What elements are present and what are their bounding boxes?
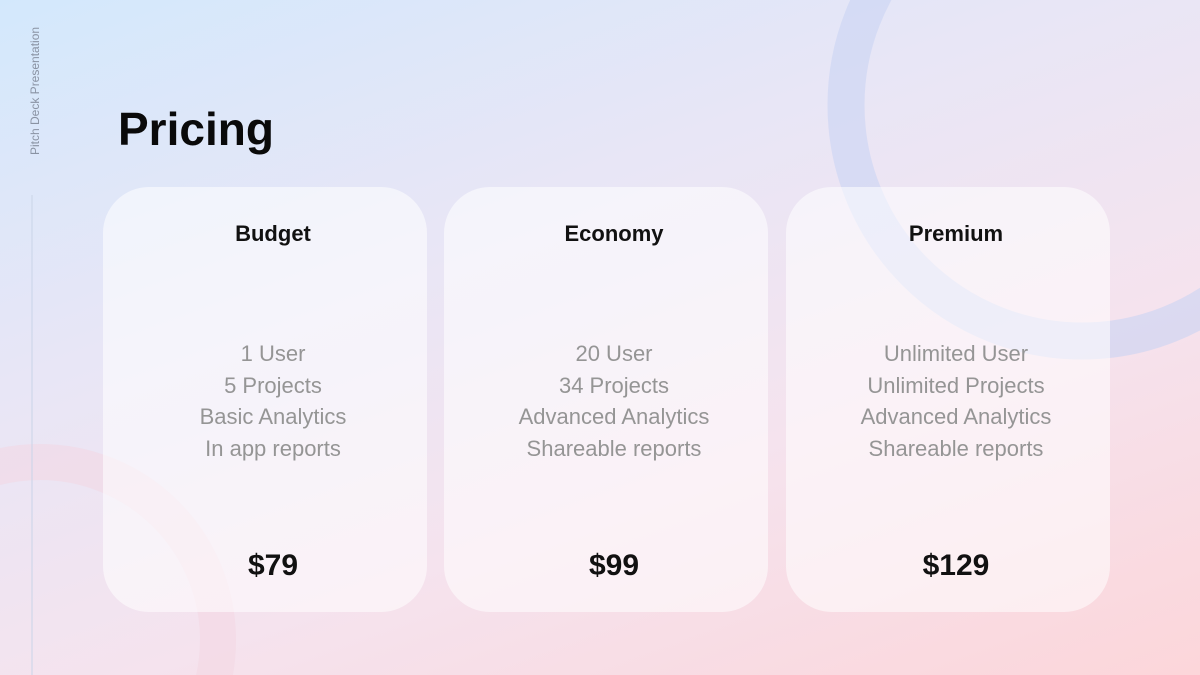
panel: Economy xyxy=(444,187,768,612)
panel: Budget xyxy=(103,187,427,612)
panel: Budget: In app reports xyxy=(205,436,341,460)
panel: Economy: Shareable reports xyxy=(527,436,701,460)
panel: Economy: 34 Projects xyxy=(559,372,669,398)
panel: Budget: 5 Projects xyxy=(224,372,322,398)
side label: Pitch Deck Presentation xyxy=(28,27,42,155)
panel: Premium: $129 xyxy=(923,549,989,582)
panel: Economy: Economy xyxy=(564,221,664,246)
panel: Economy: 20 User xyxy=(575,341,653,366)
panel: Economy: $99 xyxy=(589,549,639,582)
panel: Budget: 1 User xyxy=(241,341,305,366)
panel: Budget: Budget xyxy=(235,221,311,246)
panel: Economy: Advanced Analytics xyxy=(519,404,709,429)
panel: Budget: Basic Analytics xyxy=(200,404,346,429)
panel: Premium: Unlimited Projects xyxy=(867,372,1045,398)
panel: Premium xyxy=(786,187,1110,612)
panel: Premium: Shareable reports xyxy=(869,436,1043,460)
panel: Premium: Advanced Analytics xyxy=(861,404,1051,429)
panel: Premium: Unlimited User xyxy=(884,341,1028,366)
panel: Premium: Premium xyxy=(909,221,1003,246)
panel: Budget: $79 xyxy=(248,549,298,582)
title: Pricing xyxy=(118,103,274,155)
